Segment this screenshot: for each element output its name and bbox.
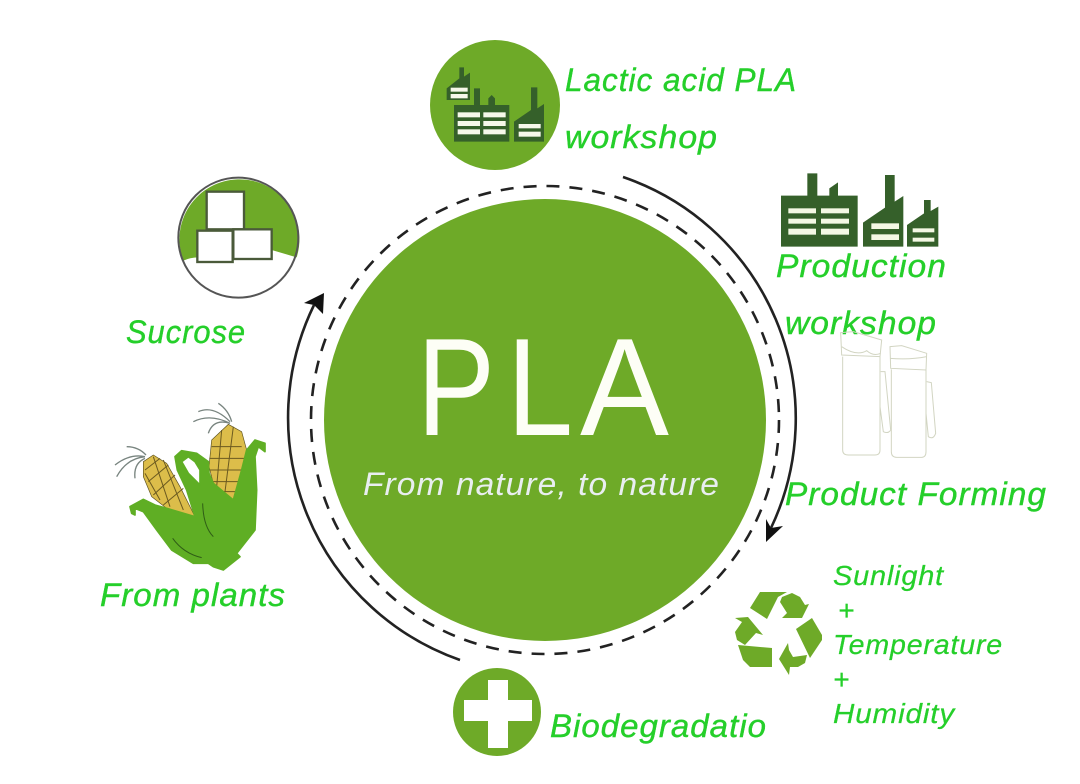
label: degradation conditions: +: [838, 595, 855, 626]
arrow: left arc: [288, 293, 460, 660]
label: degradation conditions: +: [833, 664, 850, 695]
label: product forming: Product Forming: [785, 476, 1047, 512]
label: lactic acid PLA workshop: Lactic acid PLA: [565, 62, 797, 98]
icon: recycle: [735, 592, 822, 675]
icon: bottles: [841, 332, 936, 457]
central circle: [324, 199, 766, 641]
label: production workshop: Production: [776, 248, 947, 284]
label: degradation conditions: Humidity: [833, 698, 956, 729]
icon: production workshop factories: [781, 173, 938, 247]
icon: sucrose: [178, 178, 299, 298]
label: degradation conditions: [833, 560, 1003, 729]
label: production workshop: [776, 248, 947, 341]
label: biodegradation: Biodegradatio: [550, 708, 767, 744]
icon: biodegradation cross: [453, 668, 541, 756]
label: lactic acid PLA workshop: workshop: [565, 119, 718, 155]
label: degradation conditions: Sunlight: [833, 560, 944, 591]
title: PLA: L: [507, 310, 573, 465]
label: lactic acid PLA workshop: [565, 62, 797, 155]
label: production workshop: workshop: [785, 305, 937, 341]
label: sucrose: Sucrose: [126, 314, 246, 350]
label: degradation conditions: Temperature: [833, 629, 1003, 660]
title: PLA: [417, 310, 669, 465]
label: from plants: From plants: [100, 577, 286, 613]
arrow: right arc: [623, 177, 796, 542]
icon: lactic acid workshop: [430, 40, 560, 170]
title: PLA: A: [580, 310, 669, 465]
tagline: From nature, to nature: [363, 466, 720, 502]
dashed ring: [311, 186, 779, 654]
title: PLA: P: [417, 310, 495, 465]
icon: corn: [115, 403, 265, 570]
